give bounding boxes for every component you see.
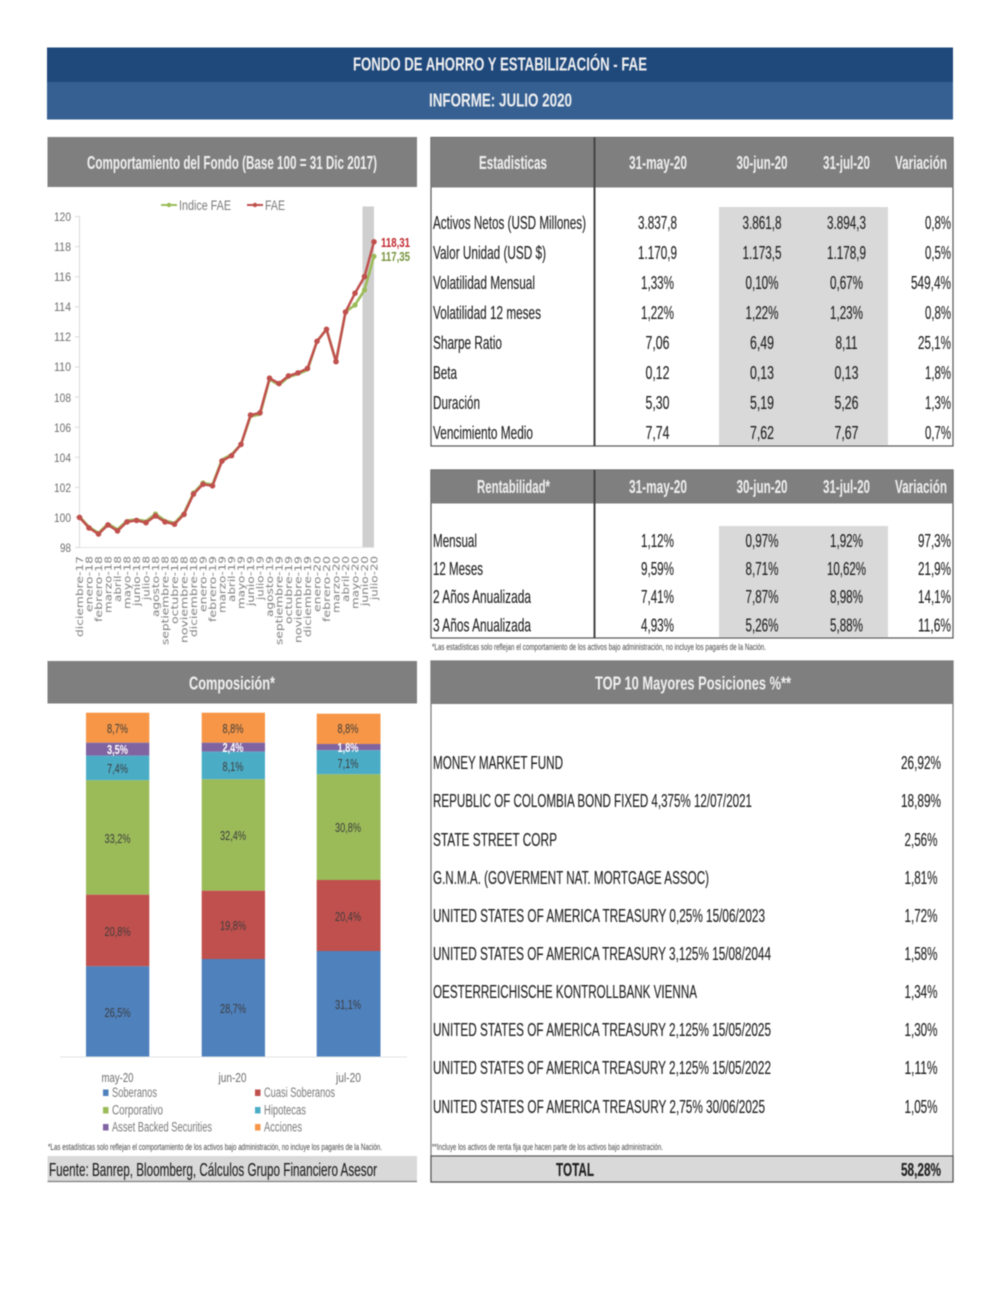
bar: jun-20: 2,4% bbox=[222, 741, 244, 755]
bar: jul-20: 8,8% bbox=[338, 722, 358, 736]
bar: jul-20 bbox=[317, 714, 380, 1057]
table header: 31-may-20 bbox=[629, 477, 687, 497]
returns rows bbox=[433, 531, 951, 636]
table values: 8,11 bbox=[836, 333, 858, 353]
x axis month labels: enero-20 bbox=[312, 556, 324, 612]
position weights: 1,05% bbox=[904, 1097, 938, 1117]
table values: 0,12 bbox=[646, 363, 670, 383]
composition legend: Acciones bbox=[264, 1120, 302, 1134]
table header: Variación bbox=[895, 477, 947, 497]
returns rows: 9,59% bbox=[641, 559, 674, 579]
bar: jul-20: 30,8% bbox=[335, 821, 361, 835]
x axis month labels: julio-19 bbox=[256, 556, 266, 601]
returns rows: 8,71% bbox=[746, 559, 778, 579]
x axis month labels: octubre-19 bbox=[284, 556, 295, 624]
position names: UNITED STATES OF AMERICA TREASURY 3,125% 15/08/2044 bbox=[433, 944, 771, 964]
x axis month labels: mayo-18 bbox=[122, 556, 134, 609]
table values: 3.894,3 bbox=[827, 213, 866, 233]
returns rows: 21,9% bbox=[918, 559, 951, 579]
composition legend: Hipotecas bbox=[264, 1102, 306, 1118]
table values: 1.170,9 bbox=[638, 243, 677, 263]
table values: 549,4% bbox=[911, 273, 951, 293]
panel: top 10 positions bbox=[431, 661, 953, 1182]
x axis month labels: mayo-19 bbox=[236, 556, 248, 609]
returns rows: 1,12% bbox=[641, 531, 674, 551]
total row bbox=[431, 1156, 953, 1182]
table header: 31-jul-20 bbox=[823, 153, 870, 173]
table values: 6,49 bbox=[750, 333, 774, 353]
returns rows: 0,97% bbox=[746, 531, 778, 551]
returns rows: 5,26% bbox=[746, 616, 778, 636]
position weights: 18,89% bbox=[901, 791, 941, 811]
bar: jul-20: 1,8% bbox=[338, 741, 358, 755]
x axis month labels: agosto-19 bbox=[265, 556, 276, 617]
table header bbox=[431, 661, 953, 704]
source note bbox=[48, 1156, 417, 1182]
y axis bbox=[54, 210, 374, 555]
source note: Fuente: Banrep, Bloomberg, Cálculos Grupo Financiero Asesor bbox=[49, 1160, 377, 1180]
table values: 0,7% bbox=[925, 423, 951, 443]
position weights: 1,58% bbox=[904, 944, 938, 964]
table header: 31-may-20 bbox=[629, 153, 687, 173]
x axis month labels: diciembre-17 bbox=[75, 556, 86, 637]
chart legend: FAE bbox=[265, 198, 285, 213]
y axis: 108 bbox=[54, 391, 71, 405]
y axis: 118 bbox=[54, 240, 71, 254]
x axis month labels: abril-19 bbox=[227, 556, 238, 602]
bar category labels: may-20 bbox=[102, 1071, 134, 1085]
row labels: Beta bbox=[433, 363, 458, 383]
table values: 0,8% bbox=[925, 213, 951, 233]
table values: 1,22% bbox=[641, 303, 674, 323]
table values: 1.178,9 bbox=[827, 243, 866, 263]
row labels: Valor Unidad (USD $) bbox=[433, 243, 546, 263]
x axis month labels: enero-18 bbox=[84, 556, 96, 612]
table values: 5,30 bbox=[646, 393, 670, 413]
table values: 0,8% bbox=[925, 303, 951, 323]
table values bbox=[638, 213, 951, 443]
x axis month labels: noviembre-19 bbox=[294, 556, 304, 643]
position weights: 1,34% bbox=[904, 982, 938, 1002]
table header: Variación bbox=[895, 153, 947, 173]
bar: may-20: 8,7% bbox=[107, 722, 128, 736]
row labels: Vencimiento Medio bbox=[433, 423, 533, 443]
shaded columns bbox=[719, 207, 888, 445]
table values: 0,5% bbox=[925, 243, 951, 263]
row labels: Sharpe Ratio bbox=[433, 333, 502, 353]
bar: jun-20: 8,8% bbox=[222, 722, 244, 736]
x axis month labels: febrero-18 bbox=[94, 556, 105, 622]
heading: fund performance: Comportamiento del Fondo (Base 100 = 31 Dic 2017) bbox=[87, 153, 377, 173]
table values: 3.837,8 bbox=[638, 213, 677, 233]
position names: UNITED STATES OF AMERICA TREASURY 2,125% 15/05/2025 bbox=[433, 1020, 771, 1040]
table header bbox=[431, 470, 953, 504]
table header: 30-jun-20 bbox=[736, 153, 788, 173]
bar: may-20: 7,4% bbox=[107, 762, 128, 776]
table values: 7,62 bbox=[750, 423, 774, 443]
position names bbox=[433, 753, 771, 1117]
table header: Estadisticas bbox=[479, 153, 547, 173]
position weights: 2,56% bbox=[904, 830, 938, 850]
y axis: 114 bbox=[54, 300, 71, 314]
composition legend: Soberanos bbox=[112, 1085, 157, 1100]
row labels: Volatilidad Mensual bbox=[433, 273, 535, 293]
y axis: 102 bbox=[54, 481, 71, 495]
bar: jun-20 bbox=[202, 713, 265, 1057]
bar: may-20: 26,5% bbox=[104, 1006, 130, 1020]
bar: may-20: 33,2% bbox=[104, 832, 130, 846]
returns rows: 11,6% bbox=[918, 616, 951, 636]
table values: 5,26 bbox=[834, 393, 858, 413]
title: FONDO DE AHORRO Y ESTABILIZACIÓN - FAE bbox=[353, 54, 647, 74]
y axis: 98 bbox=[60, 541, 71, 555]
footnote: composition: *Las estadísticas solo reflejan el comportamiento de los activos bajo administración, no incluye los pagarés de la Nación. bbox=[48, 1142, 382, 1153]
position names: OESTERREICHISCHE KONTROLLBANK VIENNA bbox=[433, 982, 697, 1002]
line: Indice FAE bbox=[80, 254, 377, 533]
x axis month labels: febrero-20 bbox=[322, 556, 333, 622]
x axis month labels: junio-20 bbox=[360, 556, 371, 607]
x axis month labels: marzo-20 bbox=[332, 556, 342, 613]
x axis month labels: abril-18 bbox=[113, 556, 124, 602]
returns rows: 2 Años Anualizada bbox=[433, 587, 532, 607]
row labels: Duración bbox=[433, 393, 480, 413]
bar: jun-20: 32,4% bbox=[220, 829, 246, 843]
table values: 1,23% bbox=[830, 303, 863, 323]
composition legend bbox=[103, 1085, 335, 1134]
row labels: Volatilidad 12 meses bbox=[433, 303, 541, 323]
returns rows: 12 Meses bbox=[433, 559, 483, 579]
end value labels: 117,35 bbox=[381, 250, 410, 264]
x axis month labels: septiembre-19 bbox=[274, 556, 286, 645]
footnote: top 10: **Incluye los activos de renta fija que hacen parte de los activos bajo administración. bbox=[432, 1142, 663, 1153]
composition legend: Asset Backed Securities bbox=[112, 1120, 212, 1134]
returns rows: 14,1% bbox=[918, 587, 951, 607]
x axis month labels: julio-18 bbox=[142, 556, 152, 601]
heading: composition: Composición* bbox=[189, 674, 275, 694]
footnote: returns table: *Las estadísticas solo reflejan el comportamiento de los activos bajo administración, no incluye los pagarés de la Nación. bbox=[432, 642, 766, 653]
returns rows: 8,98% bbox=[830, 587, 863, 607]
y axis: 100 bbox=[54, 511, 71, 525]
x axis month labels: mayo-20 bbox=[350, 556, 362, 609]
returns rows: Mensual bbox=[433, 531, 477, 551]
table values: 5,19 bbox=[750, 393, 774, 413]
x axis month labels: marzo-19 bbox=[218, 556, 228, 613]
table values: 7,67 bbox=[834, 423, 858, 443]
bar: jun-20: 8,1% bbox=[222, 760, 244, 774]
table values: 1.173,5 bbox=[742, 243, 782, 263]
returns rows: 7,41% bbox=[641, 587, 674, 607]
y axis: 112 bbox=[54, 330, 71, 344]
x axis month labels: agosto-18 bbox=[151, 556, 162, 617]
y axis: 116 bbox=[54, 270, 71, 284]
position names: G.N.M.A. (GOVERMENT NAT. MORTGAGE ASSOC) bbox=[433, 868, 709, 888]
x axis month labels: diciembre-18 bbox=[189, 556, 200, 637]
table values: 0,67% bbox=[830, 273, 863, 293]
position weights: 26,92% bbox=[901, 753, 941, 773]
table values: 1,8% bbox=[925, 363, 951, 383]
x axis month labels: diciembre-19 bbox=[303, 556, 314, 637]
table header bbox=[431, 138, 953, 188]
composition legend: Corporativo bbox=[112, 1102, 163, 1118]
bar: jun-20: 28,7% bbox=[220, 1002, 246, 1016]
heading: composition bbox=[48, 661, 417, 704]
position names: UNITED STATES OF AMERICA TREASURY 2,125% 15/05/2022 bbox=[433, 1058, 771, 1078]
y axis: 120 bbox=[54, 210, 71, 224]
table header: 30-jun-20 bbox=[736, 477, 788, 497]
panel: fund performance line chart bbox=[48, 137, 417, 645]
end value labels: 118,31 bbox=[381, 236, 410, 250]
x axis month labels: febrero-19 bbox=[208, 556, 219, 622]
table values: 1,3% bbox=[925, 393, 951, 413]
position names: UNITED STATES OF AMERICA TREASURY 0,25% 15/06/2023 bbox=[433, 906, 765, 926]
table values: 7,74 bbox=[646, 423, 670, 443]
position weights: 1,81% bbox=[904, 868, 938, 888]
panel: composition stacked bars bbox=[48, 661, 417, 1153]
subtitle: INFORME: JULIO 2020 bbox=[429, 90, 572, 110]
table values: 7,06 bbox=[646, 333, 670, 353]
bar category labels: jul-20 bbox=[335, 1071, 361, 1085]
position weights: 1,11% bbox=[904, 1058, 938, 1078]
position names: MONEY MARKET FUND bbox=[433, 753, 563, 773]
table values: 1,33% bbox=[641, 273, 674, 293]
returns rows: 4,93% bbox=[641, 616, 674, 636]
row labels: Activos Netos (USD Millones) bbox=[433, 213, 586, 233]
y axis: 110 bbox=[54, 360, 71, 374]
panel: returns table bbox=[431, 470, 953, 638]
position weights: 1,30% bbox=[904, 1020, 938, 1040]
bar: jul-20: 31,1% bbox=[335, 998, 361, 1012]
table values: 3.861,8 bbox=[742, 213, 782, 233]
returns rows: 1,92% bbox=[830, 531, 863, 551]
x axis month labels: junio-19 bbox=[246, 556, 257, 607]
table values: 0,13 bbox=[750, 363, 774, 383]
x axis month labels: septiembre-18 bbox=[160, 556, 172, 645]
chart legend bbox=[161, 198, 285, 213]
bar: jul-20: 20,4% bbox=[335, 910, 361, 924]
table values: 25,1% bbox=[918, 333, 951, 353]
row labels bbox=[433, 213, 586, 443]
bar category labels: jun-20 bbox=[218, 1071, 247, 1085]
bar: may-20: 3,5% bbox=[107, 743, 128, 757]
y axis: 104 bbox=[54, 451, 71, 465]
bar: jul-20: 7,1% bbox=[338, 757, 358, 771]
x axis month labels: octubre-18 bbox=[170, 556, 181, 624]
x axis month labels: julio-20 bbox=[370, 556, 380, 601]
x axis month labels: enero-19 bbox=[198, 556, 210, 612]
position names: UNITED STATES OF AMERICA TREASURY 2,75% 30/06/2025 bbox=[433, 1097, 765, 1117]
table header: TOP 10 Mayores Posiciones %** bbox=[595, 674, 791, 694]
position weights bbox=[901, 753, 941, 1117]
chart legend: Indice FAE bbox=[179, 198, 231, 213]
returns rows: 97,3% bbox=[918, 531, 951, 551]
total row: 58,28% bbox=[901, 1160, 941, 1180]
position weights: 1,72% bbox=[904, 906, 938, 926]
position names: REPUBLIC OF COLOMBIA BOND FIXED 4,375% 12/07/2021 bbox=[433, 791, 752, 811]
panel: statistics table bbox=[431, 137, 953, 446]
bar: may-20: 20,8% bbox=[104, 925, 130, 939]
returns rows: 10,62% bbox=[827, 559, 866, 579]
x axis month labels: abril-20 bbox=[341, 556, 352, 602]
returns rows: 3 Años Anualizada bbox=[433, 616, 532, 636]
x axis month labels: noviembre-18 bbox=[180, 556, 190, 643]
x axis month labels: junio-18 bbox=[132, 556, 143, 607]
returns rows: 5,88% bbox=[830, 616, 863, 636]
returns rows: 7,87% bbox=[746, 587, 778, 607]
bar category labels bbox=[102, 1071, 361, 1085]
heading: fund performance bbox=[48, 137, 417, 187]
composition legend: Cuasi Soberanos bbox=[264, 1085, 335, 1100]
position names: STATE STREET CORP bbox=[433, 830, 557, 850]
table values: 1,22% bbox=[746, 303, 778, 323]
line: FAE bbox=[77, 239, 377, 537]
table values: 0,13 bbox=[834, 363, 858, 383]
bar: may-20 bbox=[86, 713, 149, 1057]
x axis month labels bbox=[75, 556, 380, 645]
end value labels bbox=[381, 236, 410, 264]
shaded columns bbox=[719, 526, 888, 638]
table header: 31-jul-20 bbox=[823, 477, 870, 497]
total row: TOTAL bbox=[556, 1160, 594, 1180]
bar: jun-20: 19,8% bbox=[220, 919, 246, 933]
highlight column: latest month bbox=[362, 206, 374, 548]
x axis month labels: marzo-18 bbox=[104, 556, 114, 613]
y axis: 106 bbox=[54, 421, 71, 435]
table values: 0,10% bbox=[746, 273, 778, 293]
title banner bbox=[47, 48, 953, 120]
table header: Rentabilidad* bbox=[477, 477, 550, 497]
